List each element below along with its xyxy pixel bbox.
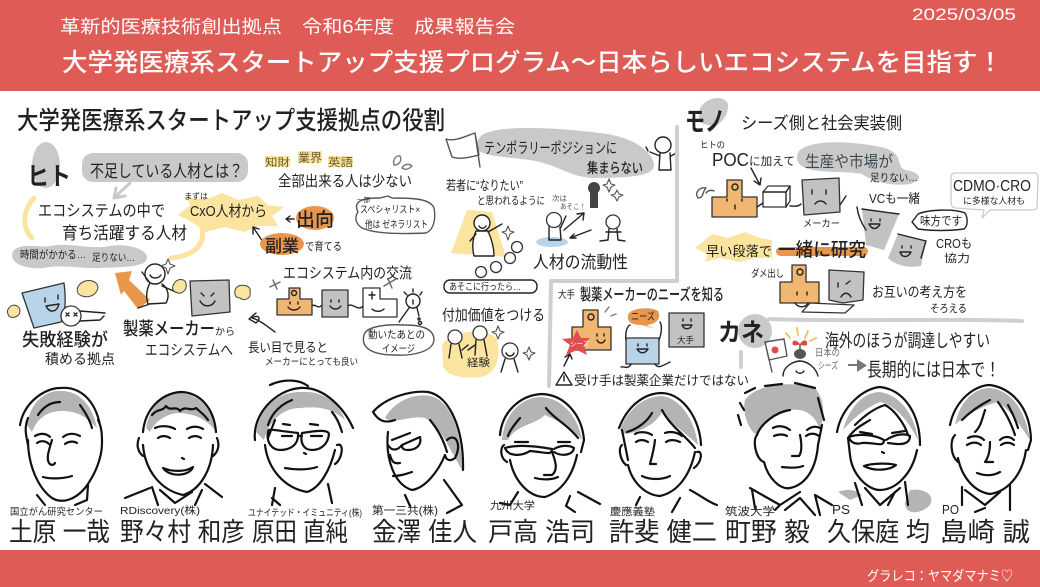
- added value text: 付加価値をつける: [442, 307, 545, 324]
- align thinking text: [872, 284, 967, 315]
- label: Shimazaki: 島崎 誠: [940, 517, 1030, 547]
- ecosystem text: エコシステムの中で: [38, 202, 165, 220]
- header title: 大学発医療系スタートアップ支援プログラム〜日本らしいエコシステムを目指す！: [62, 49, 1003, 77]
- POC text: [700, 140, 795, 185]
- main heading: 大学発医療系スタートアップ支援拠点の役割: [17, 107, 445, 135]
- skill keywords: 業界: [298, 151, 322, 165]
- portrait: Machino: [738, 383, 832, 515]
- label: Konomi: [609, 505, 717, 547]
- failure icon: [8, 281, 105, 328]
- bubble: needs: ニーズ: [631, 310, 655, 323]
- yellow cycle arcs: [25, 198, 203, 258]
- CRO text: 協力: [944, 252, 970, 265]
- fukugyo: [253, 227, 342, 256]
- icon: seed tower carrying box: [697, 180, 801, 217]
- failure text: 積める拠点: [45, 351, 115, 367]
- credit: グラレコ：ヤマダマナミ♡: [867, 568, 1013, 584]
- pharma text: エコシステムへ: [145, 342, 233, 359]
- burst: early stage: [695, 232, 772, 262]
- highlight: research together: 一緒に研究: [778, 239, 866, 261]
- VC text: VCも一緒: [869, 191, 920, 206]
- label: Todaka: [488, 499, 595, 547]
- label: Kubota: [827, 502, 930, 547]
- label: Machino: 筑波大学: [725, 504, 775, 518]
- icons: exchange characters: [270, 279, 422, 325]
- pharma text: [123, 319, 235, 359]
- bubble: temporary position: 集まらない: [587, 160, 643, 176]
- label: Kanazawa: 第一三共(株): [372, 503, 438, 517]
- figures: experience: [442, 326, 535, 377]
- burst: CxO: CxO人材から: [190, 203, 267, 220]
- gray cloud: time: 時間がかかる…: [20, 248, 86, 261]
- align thinking text: お互いの考え方を: [872, 284, 967, 300]
- bubble: image after moving: 動いたあとの: [368, 328, 425, 341]
- label: Kanazawa: [372, 503, 477, 547]
- label: Shimazaki: [940, 502, 1030, 547]
- young people text: と思われるように: [477, 195, 545, 207]
- date: 2025/03/05: [912, 5, 1016, 24]
- CRO text: [936, 236, 972, 265]
- needs heading: 大手: [558, 288, 575, 301]
- specialist bracket: スペシャリスト×: [360, 205, 420, 216]
- question bubble: [82, 153, 248, 198]
- label: Tsuchihara: 国立がん研究センター: [10, 506, 103, 518]
- label: Nonomura: 野々村 和彦: [120, 517, 245, 547]
- POC text: POC: [712, 150, 749, 170]
- icon: gray major pharma: [669, 313, 704, 347]
- bubble: ally: 味方です: [920, 213, 962, 228]
- label: Nonomura: RDiscovery(株): [120, 504, 200, 517]
- callout: CDMO CRO: [951, 173, 1038, 218]
- label: Machino: [725, 504, 810, 547]
- kane heading: カネ: [718, 319, 764, 347]
- align thinking text: そろえる: [930, 302, 967, 315]
- specialist bracket: 一部: [357, 196, 370, 204]
- portrait: Todaka: [500, 394, 600, 512]
- icon: VC and CRO cards: [857, 207, 926, 267]
- mono heading: モノ: [685, 107, 725, 137]
- fukugyo: で育てる: [305, 240, 342, 253]
- portrait: Kubota: [837, 387, 931, 512]
- portrait: Kanazawa: [373, 392, 463, 513]
- portrait: Nonomura: [125, 392, 222, 505]
- hito heading: ヒト: [27, 163, 71, 191]
- orange arrow: [115, 271, 150, 309]
- hito heading: [27, 142, 71, 191]
- young people text: 若者に“なりたい”: [446, 178, 523, 193]
- fukugyo: 副業: [265, 237, 299, 256]
- all-round text: 全部出来る人は少ない: [278, 173, 412, 190]
- figure: thinking: [646, 137, 678, 170]
- panel: pharma needs: [556, 285, 749, 388]
- label: Shimazaki: PO: [942, 502, 959, 517]
- icon: flag: [446, 133, 480, 167]
- specialist bracket: 他は ゼネラリスト: [365, 218, 428, 231]
- burst: CxO: [178, 191, 284, 232]
- label: Tsuchihara: [9, 506, 110, 547]
- bubble: image after moving: [363, 325, 434, 355]
- portrait: Konomi: [619, 393, 717, 512]
- ecosystem exchange heading: エコシステム内の交流: [283, 265, 412, 282]
- next there text: 次は: [552, 193, 567, 203]
- long-term text: 長期的には日本で！: [867, 359, 1000, 381]
- icon: worried maker: [802, 178, 846, 230]
- portrait: Harada: [255, 381, 353, 505]
- icon: seed tower and star: [562, 307, 616, 366]
- fluidity text: 人材の流動性: [533, 253, 628, 272]
- POC text: に加えて: [749, 155, 795, 168]
- mono heading: [685, 98, 728, 137]
- label: Kanazawa: 金澤 佳人: [372, 517, 477, 547]
- figure and gray maker: [138, 259, 250, 316]
- figures: experience: 経験: [467, 356, 491, 369]
- needs heading: [558, 285, 724, 304]
- shukko: [286, 206, 334, 231]
- bubble: if I went there: あそこに行ったら…: [449, 281, 521, 293]
- long-term text: [248, 313, 358, 368]
- long-term text: 長い目で見ると: [248, 340, 328, 355]
- icon: flag and sprout: [765, 328, 840, 376]
- skill keywords: [265, 151, 353, 169]
- pharma text: から: [215, 326, 235, 338]
- label: Harada: ユナイテッド・イミュニティ(株): [248, 507, 362, 519]
- burst: early stage: 早い段落で: [706, 244, 772, 259]
- label: Todaka: 九州大学: [490, 499, 535, 512]
- label: Kubota: 久保庭 均: [827, 517, 930, 547]
- label: Kubota: PS: [832, 502, 850, 517]
- gray cloud: time: 足りない…: [92, 252, 135, 264]
- mono subheading: シーズ側と社会実装側: [741, 114, 902, 133]
- failure text: [22, 329, 115, 367]
- callout: CDMO CRO: に多様な人材も: [963, 195, 1025, 206]
- panel: hito: [8, 142, 435, 368]
- bubble: image after moving: イメージ: [382, 343, 415, 355]
- warning text: 受け手は製薬企業だけではない: [574, 373, 749, 388]
- skill keywords: 知財: [265, 155, 290, 169]
- specialist bracket: [356, 196, 435, 233]
- bubble: production and market: 足りない…: [870, 172, 918, 184]
- bubble: production and market: 生産や市場が: [805, 153, 893, 171]
- panel: mono: [685, 98, 1038, 315]
- bubble: needs: [628, 308, 659, 329]
- portrait: Tsuchihara: [20, 388, 102, 505]
- label: Harada: 原田 直純: [252, 517, 348, 547]
- footer band: [0, 550, 1040, 587]
- young people text: [446, 178, 545, 207]
- pharma text: 製薬メーカー: [123, 319, 215, 339]
- label: Machino: 町野 毅: [725, 517, 810, 547]
- next there text: あそこ！: [560, 202, 586, 211]
- figures: mobility: [536, 212, 625, 247]
- icon: keyhole: [588, 179, 623, 208]
- question bubble: 不足している人材とは？: [90, 162, 243, 181]
- gray arrow: [848, 361, 865, 370]
- CRO text: CROも: [936, 236, 972, 251]
- skill keywords: 英語: [328, 155, 353, 169]
- icon: gray major pharma: 大手: [677, 335, 694, 345]
- label: Todaka: 戸高 浩司: [488, 517, 595, 547]
- bubble: ally: [912, 210, 967, 230]
- all-round text: [278, 156, 412, 190]
- long-term text: メーカーにとっても良い: [265, 356, 358, 368]
- header band: [0, 0, 1040, 91]
- ecosystem text: 育ち活躍する人材: [62, 224, 187, 243]
- panel: talent flow: [442, 128, 678, 377]
- panel: kane: [718, 314, 1000, 381]
- bubble: temporary position: [476, 128, 654, 178]
- icon: worried maker: メーカー: [803, 218, 840, 230]
- icon: flag and sprout: 日本の: [815, 347, 840, 359]
- header subtitle: 革新的医療技術創出拠点 令和6年度 成果報告会: [60, 17, 515, 37]
- overseas text: 海外のほうが調達しやすい: [825, 331, 990, 351]
- icon: seed tower and star: シーズ: [570, 339, 590, 348]
- icon: feedback scene: ダメ出し: [751, 267, 784, 280]
- label: Tsuchihara: 土原 一哉: [9, 517, 110, 547]
- label: Konomi: 慶應義塾: [610, 505, 656, 518]
- POC text: ヒトの: [700, 140, 725, 150]
- kane heading: [718, 314, 772, 367]
- burst: CxO: まずは: [184, 191, 208, 201]
- needs heading: 製薬メーカーのニーズを知る: [580, 285, 724, 304]
- label: Konomi: 許斐 健二: [609, 517, 717, 547]
- bubble: production and market: [797, 142, 919, 185]
- next there text: [552, 193, 586, 211]
- icon: blue startup: [621, 322, 670, 367]
- portrait: Shimazaki: [950, 385, 1031, 512]
- bubble: temporary position: テンポラリーポジションに: [484, 140, 617, 157]
- ecosystem text: [38, 202, 187, 243]
- icon: feedback scene: [751, 265, 864, 313]
- shukko: 出向: [296, 209, 334, 231]
- gray cloud: time: [12, 245, 147, 268]
- failure text: 失敗経験が: [22, 329, 108, 350]
- figure: role model: [451, 210, 522, 278]
- icon: flag and sprout: シーズ: [818, 360, 838, 372]
- label: Nonomura: [120, 504, 245, 547]
